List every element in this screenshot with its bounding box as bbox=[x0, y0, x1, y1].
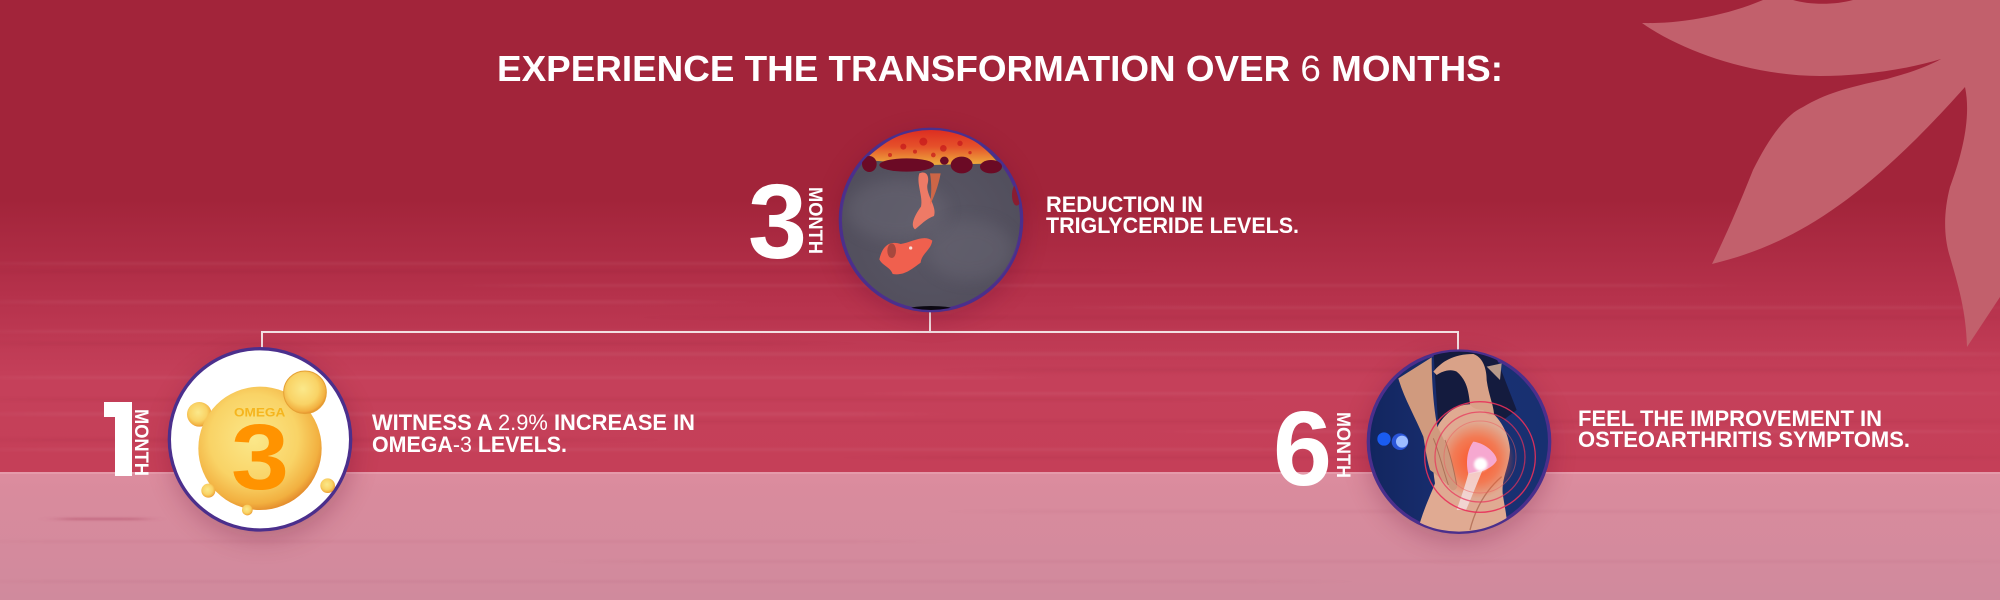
numeral 3 in capsule: 3 bbox=[231, 405, 289, 509]
numeral 1: 1 bbox=[96, 383, 154, 499]
decorative flower petals bbox=[1642, 0, 2000, 347]
description text: OMEGA-3 LEVELS. bbox=[372, 432, 567, 457]
connector lines bbox=[262, 312, 1458, 352]
title: EXPERIENCE THE TRANSFORMATION OVER 6 MONTHS: bbox=[497, 48, 1503, 89]
description text bbox=[1046, 192, 1299, 238]
icon: knee joint pain photo bbox=[1368, 350, 1550, 537]
icon: triglyceride droplet photo bbox=[840, 128, 1022, 311]
month label: MONTH bbox=[130, 409, 152, 476]
description text: TRIGLYCERIDE LEVELS. bbox=[1046, 213, 1299, 238]
milestone: 6 month bbox=[1273, 350, 1910, 539]
month label: MONTH bbox=[1332, 412, 1354, 478]
description text bbox=[1578, 406, 1910, 452]
icon: omega-3 capsule bbox=[169, 349, 351, 530]
description text: REDUCTION IN bbox=[1046, 192, 1203, 217]
month label: MONTH bbox=[804, 187, 826, 254]
circle shadow bbox=[172, 357, 352, 537]
circle shadow bbox=[1369, 359, 1549, 539]
numeral 6: 6 bbox=[1273, 390, 1332, 508]
description text: FEEL THE IMPROVEMENT IN bbox=[1578, 406, 1882, 431]
circle shadow bbox=[841, 136, 1021, 316]
description text bbox=[372, 410, 695, 457]
numeral 1 bbox=[104, 402, 132, 476]
milestone: 3 month bbox=[748, 128, 1299, 316]
description text: OSTEOARTHRITIS SYMPTOMS. bbox=[1578, 427, 1910, 452]
numeral 3: 3 bbox=[748, 163, 807, 281]
milestone: 1 month bbox=[96, 349, 695, 537]
label: omega: OMEGA bbox=[234, 406, 286, 420]
description text: WITNESS A 2.9% INCREASE IN bbox=[372, 410, 695, 435]
